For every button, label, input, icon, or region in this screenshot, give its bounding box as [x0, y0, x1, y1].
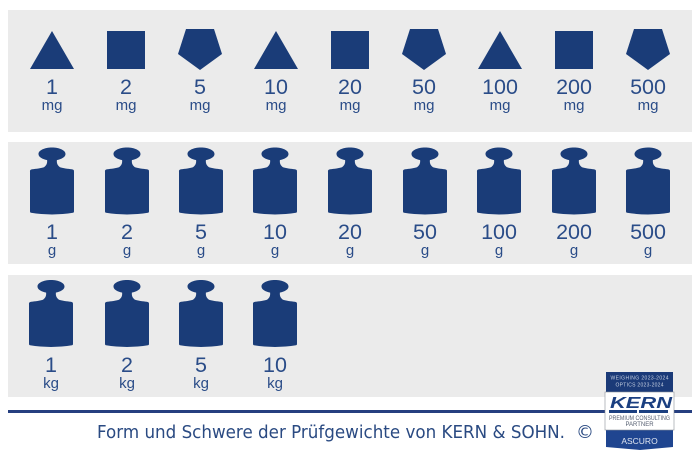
gram units: g — [271, 242, 279, 259]
milligram values — [46, 75, 666, 99]
milligram units — [42, 97, 658, 114]
badge: KERN premium consulting partner: KERN — [610, 395, 673, 412]
gram units: g — [48, 242, 56, 259]
gram units: g — [495, 242, 503, 259]
gram units: g — [570, 242, 578, 259]
kilogram values: 1 — [45, 353, 57, 377]
milligram values: 100 — [482, 75, 518, 99]
milligram units: mg — [490, 97, 510, 114]
kilogram values: 5 — [195, 353, 207, 377]
kilogram weight icons — [29, 280, 297, 347]
kilogram units: kg — [193, 375, 209, 392]
gram values: 50 — [413, 220, 437, 244]
milligram units: mg — [564, 97, 584, 114]
panel: milligram weights — [8, 10, 692, 132]
milligram units: mg — [638, 97, 658, 114]
kilogram values — [45, 353, 287, 377]
gram units — [48, 242, 652, 259]
footer caption: Form und Schwere der Prüfgewichte von KERN & SOHN. — [97, 422, 565, 443]
kilogram units: kg — [43, 375, 59, 392]
footer rule — [8, 410, 692, 413]
gram values: 5 — [195, 220, 207, 244]
milligram values: 5 — [194, 75, 206, 99]
badge: KERN premium consulting partner — [605, 372, 674, 450]
gram values: 200 — [556, 220, 592, 244]
gram units: g — [421, 242, 429, 259]
milligram shapes — [30, 29, 670, 70]
gram values: 1 — [46, 220, 58, 244]
milligram values: 1 — [46, 75, 58, 99]
gram units: g — [123, 242, 131, 259]
badge: KERN premium consulting partner: OPTICS 2023-2024 — [616, 382, 664, 388]
gram values: 20 — [338, 220, 362, 244]
kilogram units: kg — [267, 375, 283, 392]
milligram values: 10 — [264, 75, 288, 99]
milligram values: 500 — [630, 75, 666, 99]
gram units: g — [197, 242, 205, 259]
milligram units: mg — [190, 97, 210, 114]
gram weight icons — [30, 148, 670, 214]
badge: KERN premium consulting partner: ASCURO — [621, 436, 658, 446]
milligram values: 200 — [556, 75, 592, 99]
kilogram values: 2 — [121, 353, 133, 377]
gram values — [46, 220, 666, 244]
kilogram values: 10 — [263, 353, 287, 377]
kilogram units: kg — [119, 375, 135, 392]
milligram units: mg — [266, 97, 286, 114]
gram units: g — [644, 242, 652, 259]
footer caption: © — [576, 422, 594, 443]
badge: KERN premium consulting partner: WEIGHING 2023-2024 — [610, 376, 669, 382]
gram units: g — [346, 242, 354, 259]
milligram units: mg — [340, 97, 360, 114]
kilogram units — [43, 375, 283, 392]
milligram units: mg — [414, 97, 434, 114]
badge: KERN premium consulting partner: PREMIUM CONSULTING — [609, 416, 670, 422]
milligram units: mg — [42, 97, 62, 114]
milligram units: mg — [116, 97, 136, 114]
panel: gram weights — [8, 142, 692, 264]
panel: kilogram weights — [8, 275, 692, 397]
milligram values: 20 — [338, 75, 362, 99]
gram values: 2 — [121, 220, 133, 244]
milligram values: 2 — [120, 75, 132, 99]
milligram values: 50 — [412, 75, 436, 99]
gram values: 10 — [263, 220, 287, 244]
gram values: 100 — [481, 220, 517, 244]
gram values: 500 — [630, 220, 666, 244]
badge: KERN premium consulting partner: PARTNER — [625, 422, 654, 428]
